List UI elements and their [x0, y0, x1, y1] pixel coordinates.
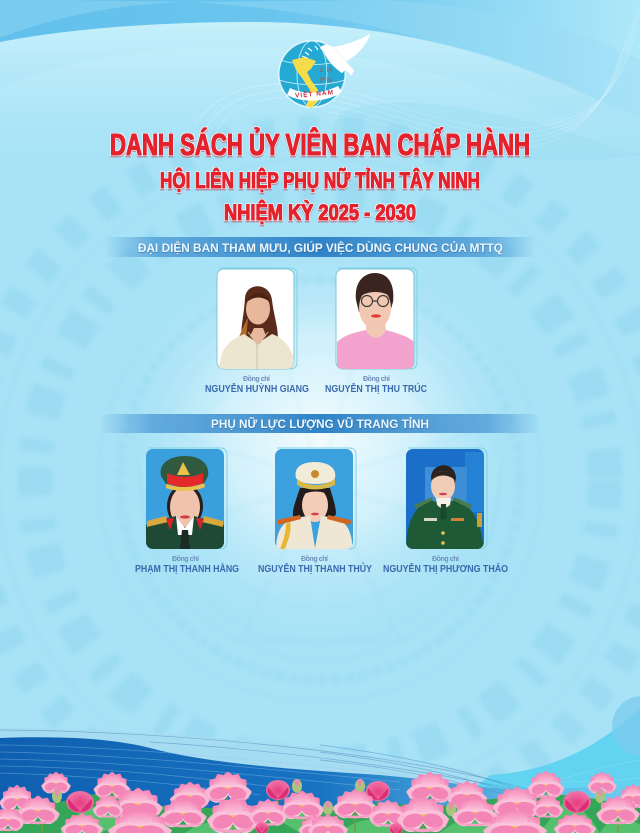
- ribbon text: VIỆT NAM: [295, 87, 333, 100]
- name 3: Đồng chí: [172, 554, 200, 563]
- logo letters: LH: [320, 65, 332, 74]
- vietnam map: [292, 57, 319, 108]
- name 3: PHẠM THỊ THANH HẰNG: [135, 562, 239, 575]
- photo card 1: [217, 268, 297, 372]
- section heading 2: [100, 414, 540, 433]
- name 2: [325, 374, 427, 395]
- name 4: NGUYỄN THỊ THANH THỦY: [258, 562, 372, 575]
- photo card 2: [336, 268, 417, 372]
- name 1: [205, 374, 309, 395]
- logo: [278, 33, 371, 108]
- name 4: [258, 554, 372, 575]
- lotus flowers: [0, 769, 640, 833]
- name 5: NGUYỄN THỊ PHƯƠNG THẢO: [383, 562, 508, 575]
- section heading 1: ĐẠI DIỆN BAN THAM MƯU, GIÚP VIỆC DÙNG CHUNG CỦA MTTQ: [138, 242, 503, 255]
- logo: PN: [320, 75, 332, 84]
- term: NHIỆM KỲ 2025 - 2030: [224, 200, 416, 225]
- name 2: Đồng chí: [363, 374, 391, 383]
- name 1: NGUYỄN HUỲNH GIANG: [205, 382, 309, 395]
- subtitle: HỘI LIÊN HIỆP PHỤ NỮ TỈNH TÂY NINH: [160, 168, 480, 193]
- dove: [302, 33, 371, 76]
- name 3: [135, 554, 239, 575]
- section heading 1: [105, 237, 535, 257]
- green leaves: [0, 782, 640, 833]
- section heading 2: PHỤ NỮ LỰC LƯỢNG VŨ TRANG TỈNH: [211, 416, 429, 431]
- name 2: NGUYỄN THỊ THU TRÚC: [325, 382, 427, 395]
- name 5: [383, 554, 508, 575]
- photo card 5: [406, 448, 487, 552]
- photo card 4: [275, 448, 356, 552]
- logo ribbon: [287, 86, 342, 101]
- name 1: Đồng chí: [243, 374, 271, 383]
- photo card 3: [146, 448, 227, 552]
- bottom waves: [0, 696, 640, 833]
- name 5: Đồng chí: [432, 554, 460, 563]
- name 4: Đồng chí: [301, 554, 329, 563]
